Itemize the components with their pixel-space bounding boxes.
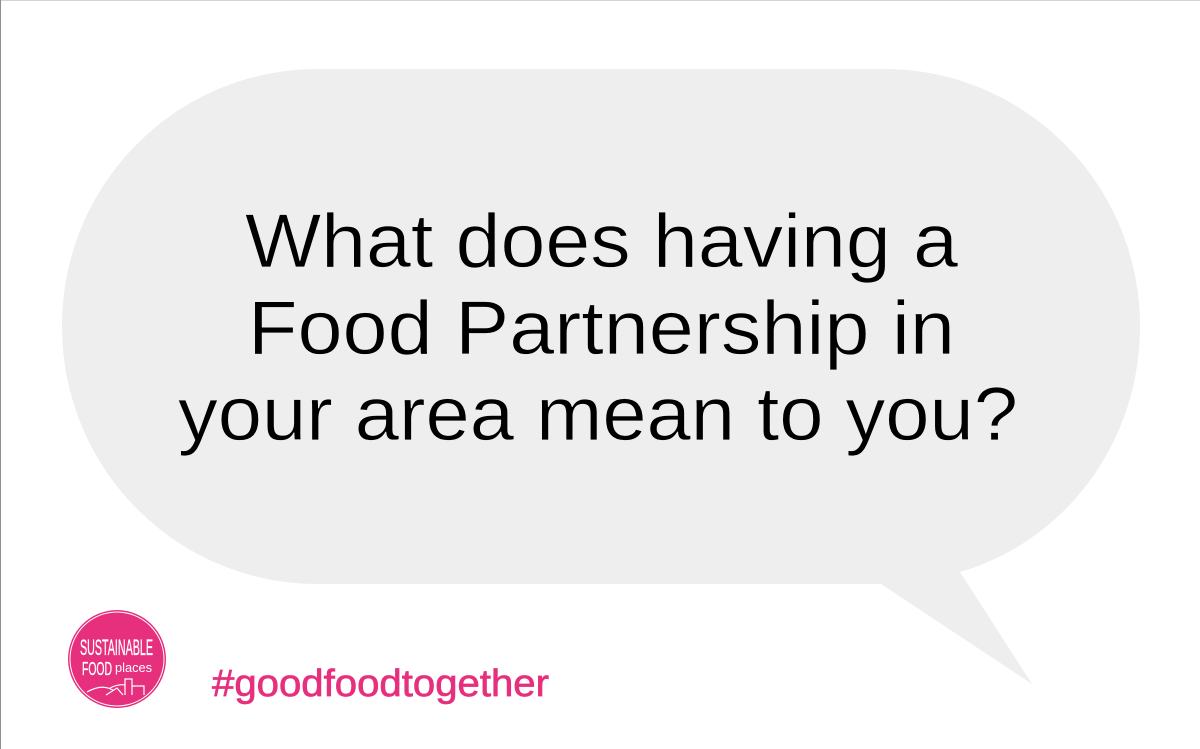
heading question: What does having a: [245, 199, 959, 284]
logo: Sustainable Food Places: FOOD: [82, 659, 112, 679]
heading question: Food Partnership in: [248, 286, 955, 371]
heading question: [178, 199, 1018, 457]
speech bubble: [62, 69, 1140, 684]
logo: Sustainable Food Places: [68, 610, 166, 708]
logo: Sustainable Food Places: places: [115, 660, 152, 675]
hashtag: #goodfoodtogether: [212, 663, 549, 705]
logo: Sustainable Food Places: SUSTAINABLE: [80, 635, 153, 660]
heading question: your area mean to you?: [178, 372, 1018, 457]
icon: hills and buildings: [87, 679, 144, 695]
